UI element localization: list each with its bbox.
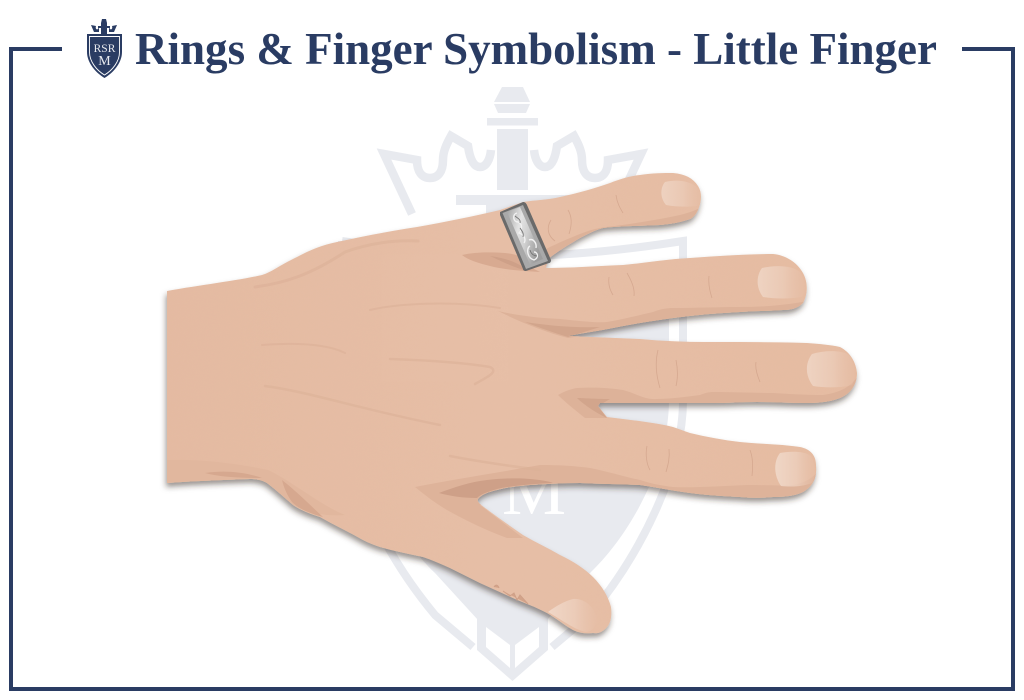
middle nail bbox=[807, 351, 855, 387]
logo emblem bbox=[87, 19, 122, 78]
hand silhouette bbox=[167, 173, 857, 633]
ring nail bbox=[758, 266, 805, 298]
middle finger underside and web bbox=[558, 376, 858, 418]
logo monogram: RSR bbox=[94, 43, 116, 55]
logo crown and sword bbox=[91, 19, 117, 34]
watermark shield outline bbox=[342, 241, 683, 647]
knuckle creases bbox=[548, 195, 760, 476]
hand veins bbox=[326, 262, 526, 468]
little finger underside bbox=[545, 208, 700, 266]
logo emblem: M bbox=[98, 54, 111, 69]
nails bbox=[548, 181, 855, 632]
skin shading bbox=[168, 195, 856, 538]
ring finger underside bbox=[498, 301, 808, 338]
wrist and thumb base folds bbox=[168, 482, 170, 483]
watermark crown bbox=[384, 136, 641, 214]
ring band bbox=[500, 202, 551, 271]
title: Rings & Finger Symbolism - Little Finger bbox=[135, 24, 937, 74]
ring bbox=[500, 202, 551, 271]
ring engraving bbox=[514, 213, 537, 260]
watermark sword bbox=[456, 87, 569, 245]
little finger web shadow bbox=[462, 252, 540, 272]
index nail bbox=[775, 452, 815, 487]
hand illustration bbox=[160, 165, 865, 640]
little nail bbox=[661, 181, 701, 207]
watermark shield point bbox=[477, 617, 548, 681]
thumb wrinkles bbox=[494, 585, 528, 604]
index finger underside bbox=[415, 465, 818, 538]
logo shield bbox=[87, 34, 122, 78]
ring face bbox=[502, 205, 548, 269]
thumb nail bbox=[548, 599, 597, 632]
watermark monogram: M bbox=[502, 450, 566, 530]
watermark logo bbox=[342, 87, 683, 681]
watermark shield fill bbox=[356, 262, 669, 620]
